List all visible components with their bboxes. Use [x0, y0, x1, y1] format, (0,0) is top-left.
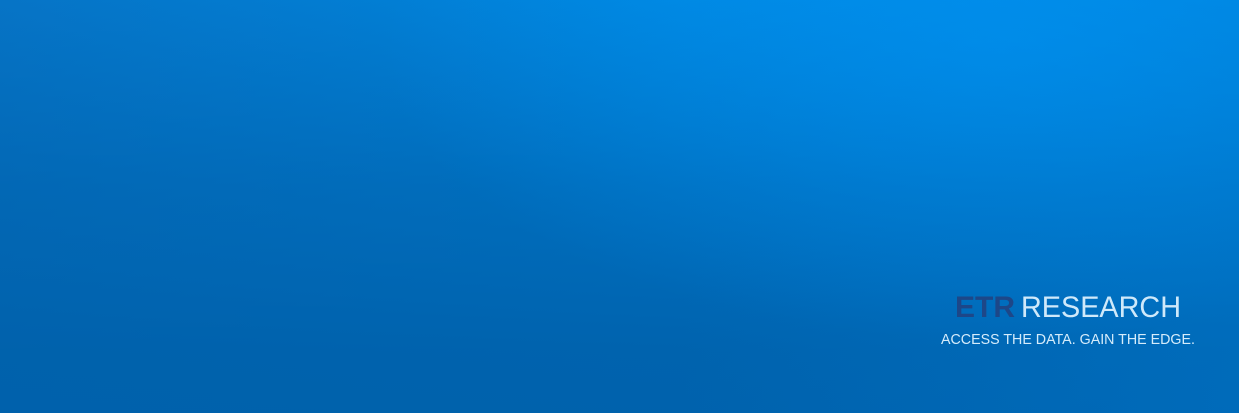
logo wordmark: RESEARCH: RESEARCH — [1021, 291, 1181, 324]
tagline: ACCESS THE DATA. GAIN THE EDGE. — [941, 332, 1195, 348]
logo wordmark: ETR: ETR — [955, 291, 1015, 324]
